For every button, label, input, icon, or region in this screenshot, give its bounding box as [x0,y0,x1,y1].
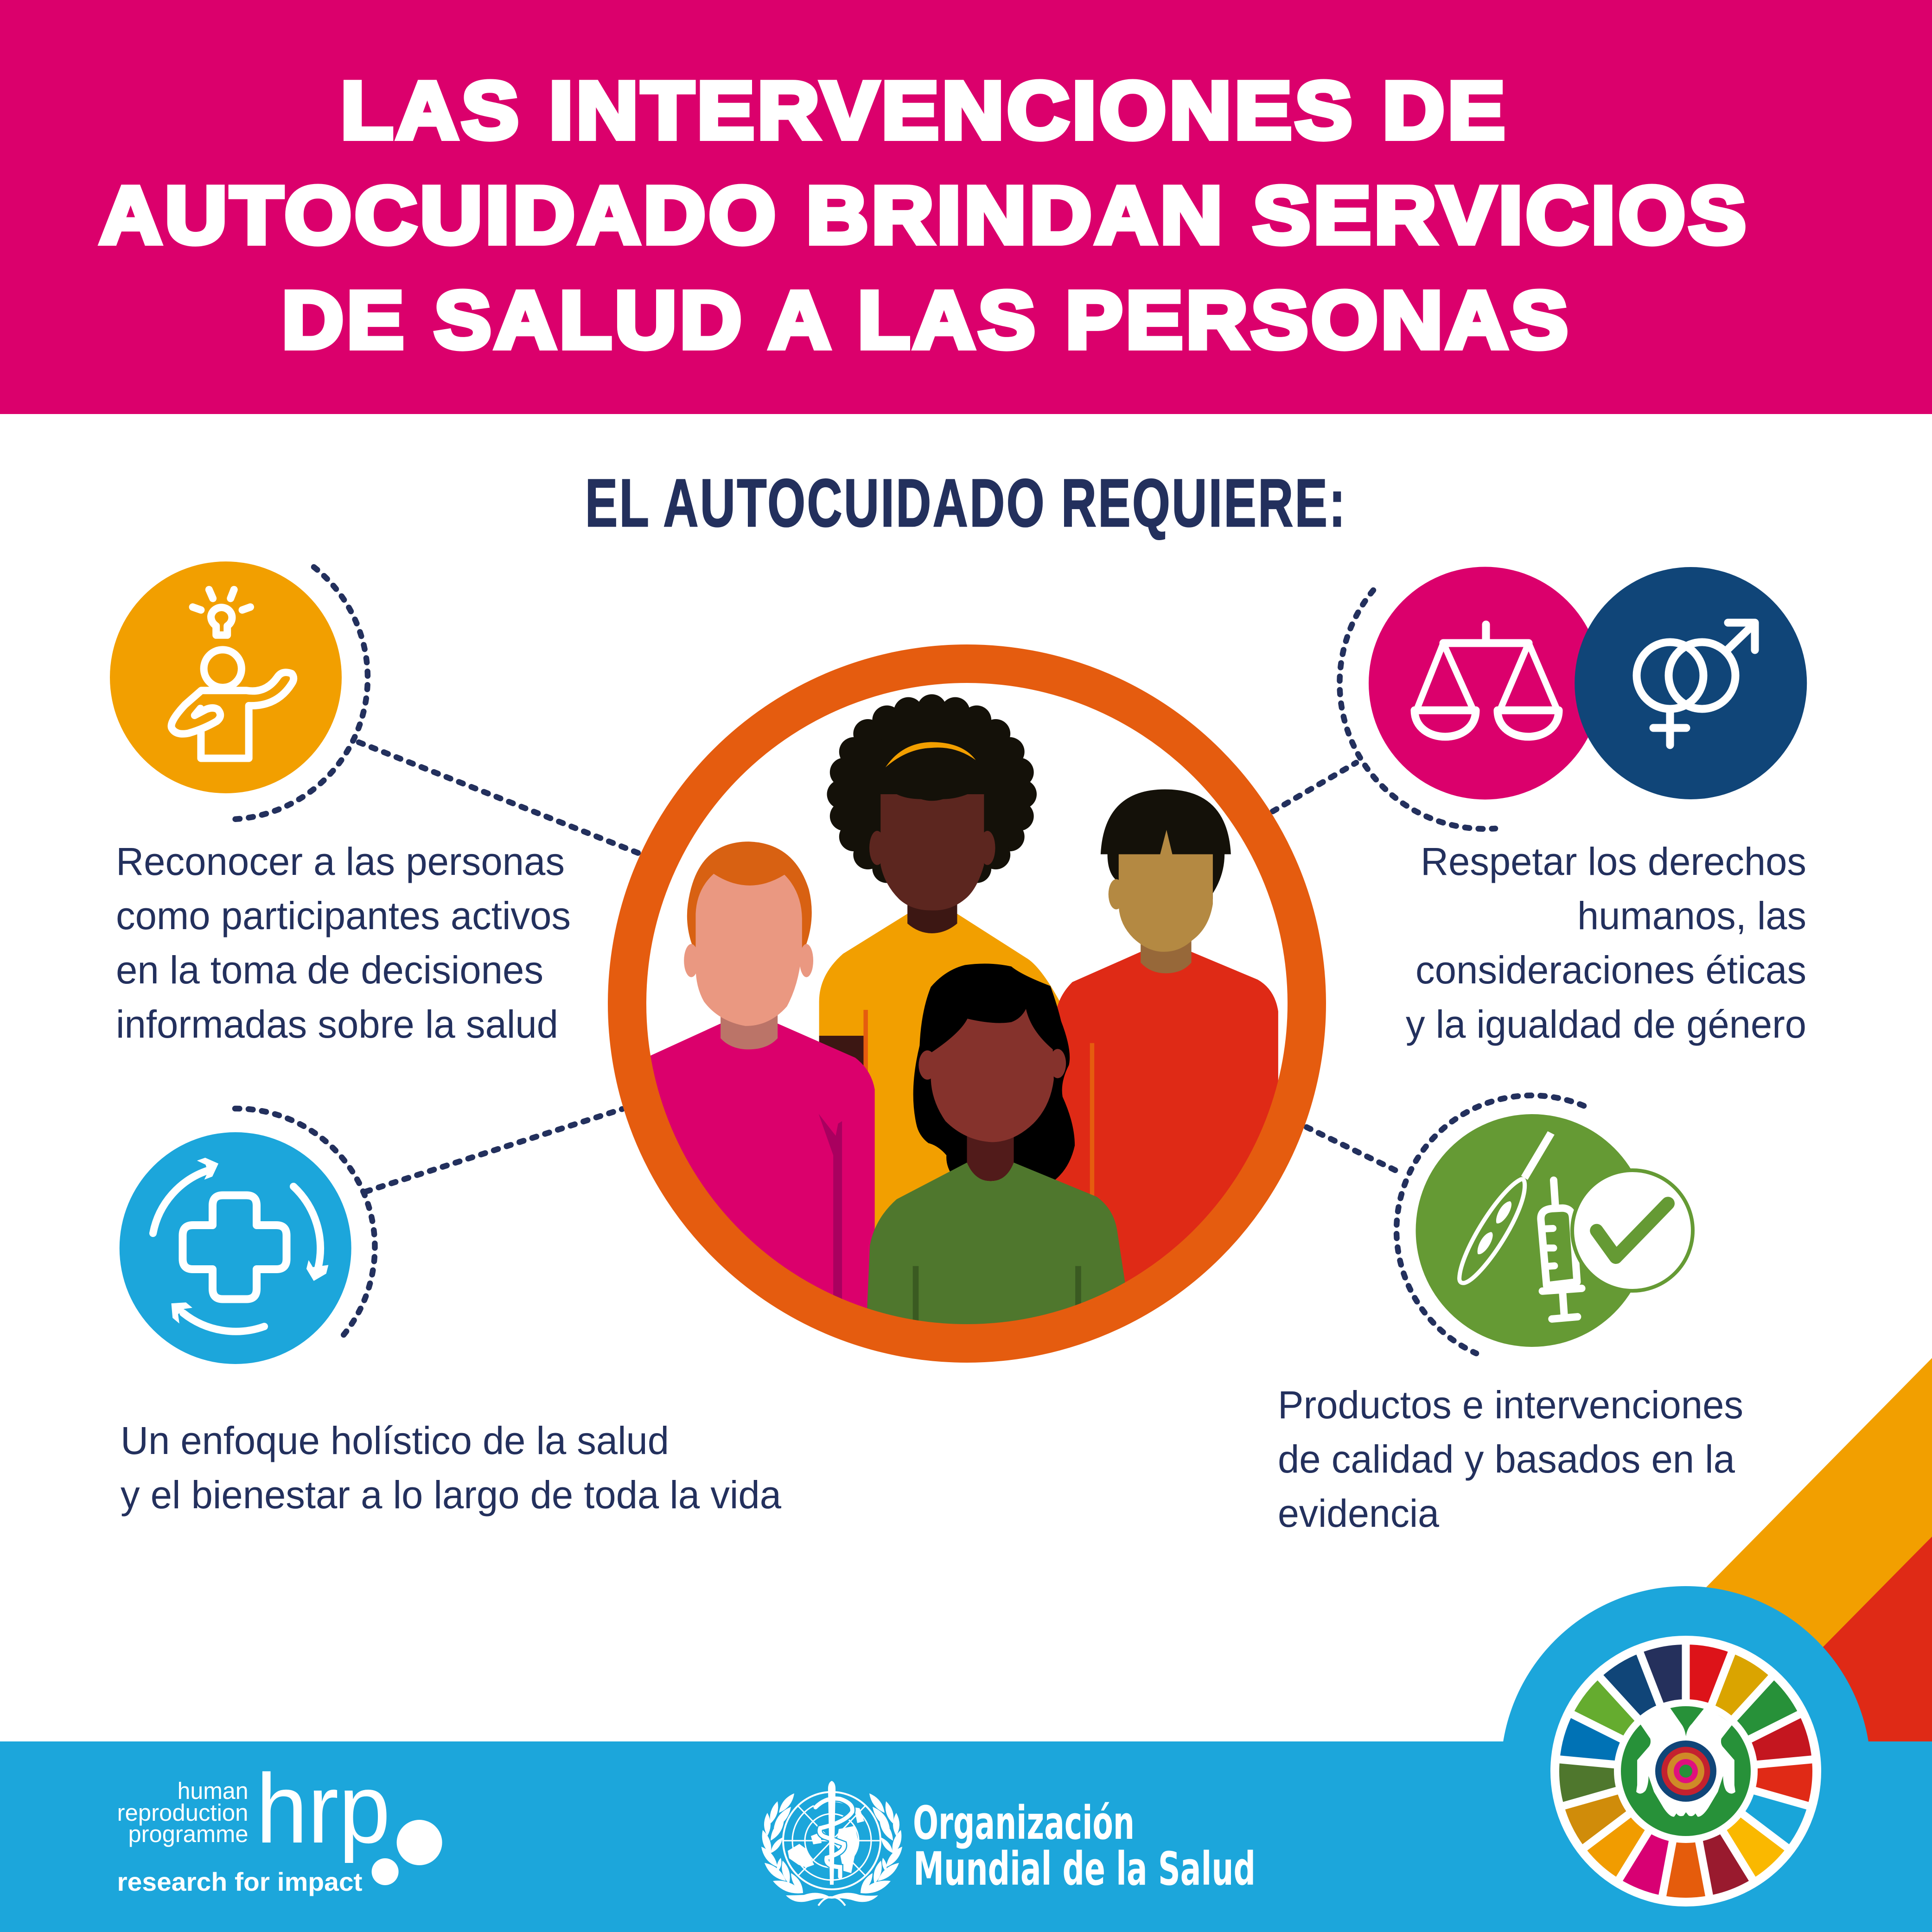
text: rights and equality: y la igualdad de género [1406,1002,1806,1046]
footer arch behind wheel [1503,1586,1868,1741]
text: active participants: Reconocer a las personas [116,840,565,883]
dashed arc: products icon [1396,1096,1584,1353]
text: rights and equality [1406,840,1806,1046]
title: AUTOCUIDADO BRINDAN SERVICIOS [100,170,1749,260]
connector: products to people circle [1307,1127,1403,1174]
logo text: Organización Mundial de la Salud [913,1797,1256,1896]
orange ring [627,664,1307,1344]
person: right with red shirt [1055,789,1278,1282]
text: rights and equality: humanos, las [1577,894,1806,937]
connector: informed decisions to people circle [359,742,641,854]
logo: hrp: research for impact [117,1867,363,1896]
icon: scales of justice on pink circle [1369,567,1601,799]
dashed arc: rights icons [1339,590,1495,829]
text: quality products: Productos e intervenciones [1278,1383,1743,1427]
diagonal red stripe [1762,1537,1932,1741]
text: active participants: como participantes activos [116,894,571,937]
title: LAS INTERVENCIONES DE [341,65,1508,155]
icon: SDG wheel with hands [1550,1636,1821,1906]
title: DE SALUD A LAS PERSONAS [282,274,1571,365]
text: active participants [116,840,571,1046]
text: quality products: evidencia [1278,1492,1439,1535]
text: quality products: de calidad y basados en la [1278,1437,1735,1481]
logo text: Organización Mundial de la Salud: Organización [913,1797,1135,1850]
logo: hrp: programme [128,1821,249,1847]
text: rights and equality: Respetar los derechos [1421,840,1806,883]
person: back centre with afro [819,694,1059,1230]
text: quality products [1278,1383,1743,1535]
person: left with pink shirt [650,842,875,1308]
text: rights and equality: consideraciones éticas [1416,948,1806,992]
diagonal amber stripe [1660,1358,1932,1711]
icon: check mark badge [1572,1170,1693,1291]
icon: swab, syringe and check on green circle [1416,1114,1693,1347]
logo: hrp [117,1753,442,1896]
icon: medical cross with cycle arrows on blue circle [120,1132,351,1364]
text: active participants: en la toma de decisiones [116,948,543,992]
header banner [0,0,1932,414]
people illustration in orange ring [609,664,1307,1358]
text: holistic approach: y el bienestar a lo largo de toda la vida [121,1473,781,1517]
connector: holistic approach to people circle [366,1109,622,1192]
text: active participants: informadas sobre la salud [116,1002,558,1046]
dashed arc: idea icon [233,567,368,819]
subheading: EL AUTOCUIDADO REQUIERE: [585,465,1347,541]
logo text: Organización Mundial de la Salud: Mundial de la Salud [913,1843,1256,1896]
logo: hrp: hrp [256,1753,390,1863]
wheel segments [1559,1645,1812,1898]
footer band [0,1741,1932,1932]
person: front with green shirt [865,963,1125,1358]
dashed arc: holistic icon [235,1109,375,1341]
icon: idea person on amber circle [110,561,342,793]
title [100,65,1749,365]
connector: rights to people circle [1273,763,1356,811]
logo: hrp: human [178,1778,249,1804]
text: holistic approach [121,1419,781,1517]
logo: WHO emblem [759,1781,905,1906]
hands [1636,1707,1735,1817]
icon: gender symbols on navy circle [1575,567,1807,799]
logo: hrp: reproduction [117,1799,249,1826]
text: holistic approach: Un enfoque holístico de la salud [121,1419,669,1462]
